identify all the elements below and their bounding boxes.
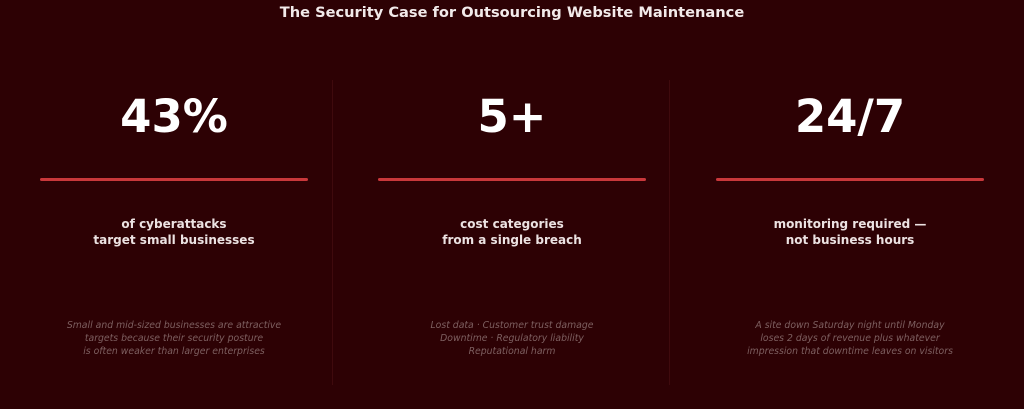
note	[430, 320, 594, 357]
stat number: 24/7	[795, 90, 905, 143]
note	[747, 320, 953, 357]
note: loses 2 days of revenue plus whatever	[760, 333, 940, 344]
note: A site down Saturday night until Monday	[755, 320, 945, 331]
label: of cyberattacks	[121, 217, 227, 231]
note	[67, 320, 281, 357]
panel: 5+	[378, 90, 646, 357]
stat number: 5+	[477, 90, 547, 143]
label: target small businesses	[93, 233, 255, 247]
title: The Security Case for Outsourcing Website Maintenance	[280, 4, 744, 21]
stat number: 43%	[120, 90, 228, 143]
note: is often weaker than larger enterprises	[83, 346, 265, 357]
label: not business hours	[786, 233, 914, 247]
label: from a single breach	[442, 233, 582, 247]
label: cost categories	[460, 217, 564, 231]
label	[774, 217, 926, 247]
note: Reputational harm	[469, 346, 555, 357]
note: Small and mid-sized businesses are attractive	[67, 320, 281, 331]
note: Lost data · Customer trust damage	[430, 320, 594, 331]
label	[93, 217, 255, 247]
note: targets because their security posture	[85, 333, 263, 344]
panel: 43%	[40, 90, 308, 357]
note: impression that downtime leaves on visitors	[747, 346, 953, 357]
label: monitoring required —	[774, 217, 926, 231]
note: Downtime · Regulatory liability	[440, 333, 584, 344]
label	[442, 217, 582, 247]
panel: 24/7	[716, 90, 984, 357]
